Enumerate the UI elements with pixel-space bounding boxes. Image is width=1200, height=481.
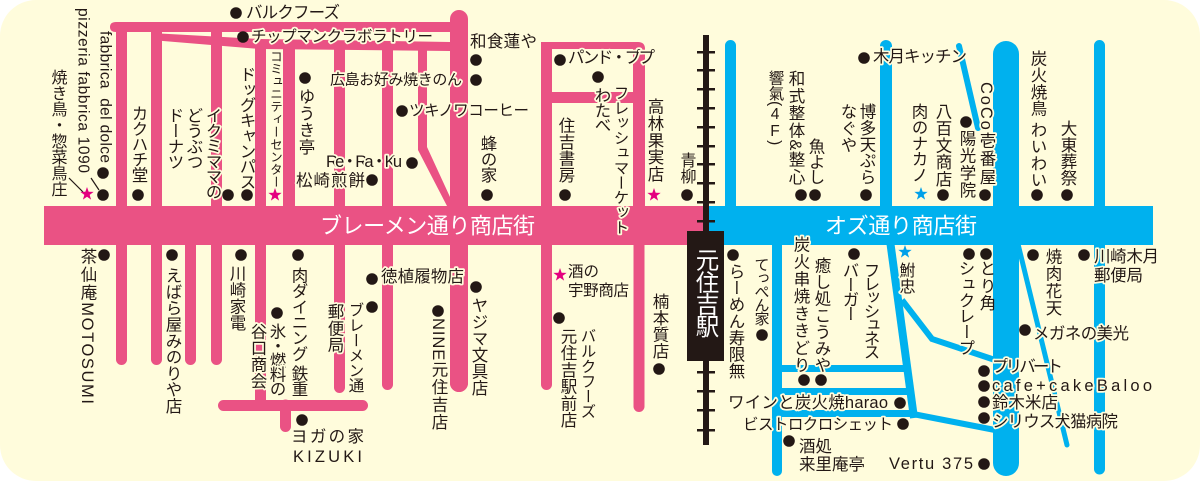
shop: Taniguchi Shokai ice and fuel [248,307,286,397]
shop: Yakiniku Hanaten: 焼肉花天 [1043,248,1062,316]
community centre: コミュニティーセンター [268,50,282,188]
shop: Bulk Foods Motosumiyoshi station: バルクフーズ [578,328,596,419]
shop: Bulk Foods Motosumiyoshi station: 元住吉駅前店 [558,328,577,428]
shop: Wa-shiki Seitai & Seishin, Hibiki: 和式整体&整心 [786,70,805,185]
shop: Koumiya: 癒し処こうみや [812,257,831,373]
shop: Niku no Nakano: 肉のナカノ [909,103,927,183]
shop: Sakedokoro Kuriantei: 来里庵亭 [799,455,865,474]
shop: Suzuki rice: 鈴木米店 [992,393,1058,412]
street name: Oz: オズ通り商店街 [825,214,977,238]
shop: Ikumimama no Doubutsu Donuts: ドーナツ [165,107,183,170]
shop: Yoga no Ie Kizuki: KIZUKI [293,448,362,466]
shop: Sumibi Yakitori Waiwai: 炭火焼鳥 わいわい [1028,50,1047,188]
shop: Wine and charcoal harao: ワインと炭火焼harao [728,393,888,412]
station box: Motosumiyoshi: 元住吉駅 [692,248,719,338]
street name: Bremen: ブレーメン通り商店街 [320,214,535,238]
post office: Bremen [325,301,378,393]
pink road network: Bremen street [44,10,703,426]
shop: Sake no Uno Shoten: 宇野商店 [568,282,629,300]
shop: Kakuhachido: カクハチ堂 [129,105,147,183]
shop: Aoyagi: 青柳 [678,152,696,184]
shop: Freshness Burger: フレッシュネス [861,262,879,360]
shop: pizzeria fabbrica 1090: pizzeria fabbrica 1090 [74,8,92,173]
shop: Daito funeral: 大東葬祭 [1058,120,1077,186]
railway line [697,35,715,445]
shop: cafe+cake Baloo: cafe+cakeBaloo [992,377,1152,395]
post office: Kawasaki Kizuki: 川崎木月 [1094,247,1159,266]
shop: Ikumimama no Doubutsu Donuts: イクミママの [203,107,221,200]
shop: Yukitei: ゆうき亭 [296,88,315,156]
shop: CoCo Ichibanya: CoCo壱番屋 [977,82,996,185]
shop: Yoga no Ie Kizuki [291,414,364,466]
shop: NINE Motosumiyoshi: NINE元住吉店 [429,318,448,430]
shop: Yaomon Shoten: 八百文商店 [933,103,952,187]
shop: Watabe: わたべ [592,87,611,133]
shop: Sake no Uno Shoten: 酒の [568,262,599,280]
shop: Ikumimama no Doubutsu Donuts: どうぶつ [184,107,203,170]
shop: Yakiniku Hanaten [1027,248,1062,316]
shop: Taniguchi Shokai ice and fuel: 谷口商会 [248,323,267,389]
shop: Pribart: プリバート [992,357,1063,376]
shop: Hakata Tempura Naguya: なぐや [838,103,856,153]
shop: Niku Dining Tetsuju: 肉ダイニング 鉄重 [289,267,308,397]
shop: yakitori Torisho [48,69,94,200]
shop: Aoyagi [678,152,696,201]
post office: Kawasaki Kizuki [1078,247,1159,285]
shop: Taniguchi Shokai ice and fuel: 氷・燃料の [267,323,286,397]
shop: Fresh Market: フレッシュマーケット [612,85,628,235]
shop: Mokugetsu Kitchen: 木月キッチン [873,47,967,66]
shop: Re-Ra-Ku: Re・Ra・Ku [326,153,402,171]
shop: Bistro Crochet: ビストロクロシェット [743,416,893,434]
shop: Tsukinowa Coffee: ツキノワコーヒー [409,102,529,120]
shop: Funachu [896,245,916,294]
shop: Hachinoya [478,135,497,201]
shop: Kawasaki Kaden: 川崎家電 [227,265,246,331]
shop: Ebaraya Minoriya: えばら屋みのりや店 [163,267,182,414]
clinic: Sirius animal hospital: シリウス犬猫病院 [992,412,1118,431]
shop: Washoku Hasuya [470,32,537,66]
shop: Hachinoya: 蜂の家 [478,135,497,184]
shop: Pando Pupu: パンド・ププ [568,48,656,67]
shop: fabbrica del dolce: fabbrica del dolce [96,31,114,163]
school: Yoko Gakuin: 陽光学院 [957,130,976,198]
shop: Wa-shiki Seitai & Seishin, Hibiki [766,70,807,201]
post office: Kawasaki Kizuki: 郵便局 [1094,266,1143,285]
shop: Freshness Burger: バーガー [840,262,858,322]
shop: Ramen Jugemu: らーめん寿限無 [726,263,745,379]
shop: pizzeria fabbrica 1090 [74,8,109,201]
shop: Megane no Bikou: メガネの美光 [1033,324,1129,343]
shop: Teppenya: てっぺん家 [752,257,770,327]
shop: Matsuzaki senbei: 松崎煎餅 [296,171,365,190]
shop: Funachu: 鮒忠 [896,262,916,294]
post office: Bremen: ブレーメン通 [346,302,364,393]
shop: Ikumimama no Doubutsu Donuts [165,107,234,201]
shop: Bulk Foods: バルクフーズ [246,3,340,22]
shop: Torikaku: とり角 [977,260,996,312]
shop: Sakedokoro Kuriantei: 酒処 [799,437,832,456]
shop: Hakata Tempura Naguya [838,103,876,201]
shop: Kikidori: 炭火串焼ききどり [791,236,810,373]
shop: Dog Campus: ドッグキャンパス [237,66,255,190]
shop: Washoku Hasuya: 和食蓮や [470,32,537,51]
shop: Chasen-an Motosumi [78,248,110,404]
shop: Freshness Burger [840,248,879,360]
shop: Sake no Uno Shoten [553,262,629,300]
shop: yakitori Torisho: 焼き鳥・惣菜鳥庄 [48,69,68,197]
station box: Motosumiyoshi [687,231,724,361]
shop: Chipmunk Laboratory: チップマンクラボラトリー [251,28,433,46]
shop: Uoyoshi [806,138,825,201]
shop: Hakata Tempura Naguya: 博多天ぷら [857,103,876,185]
shop: Yajima stationery: ヤジマ文具店 [469,297,488,396]
shop: Yoga no Ie Kizuki: ヨガの家 [291,427,364,446]
shop: Takabayashi fruit shop: 高林果実店 [645,98,664,182]
shop: Bulk Foods Motosumiyoshi station [553,312,596,428]
post office: Bremen: 郵便局 [325,303,344,354]
blue road network: Oz street [705,40,1153,476]
shop: Hiroshima okonomiyaki Non: 広島お好み焼きのん [330,72,462,88]
shop: Sumiyoshi Shobo: 住吉書房 [556,117,575,184]
shop: Kusumoto pawn: 楠本質店 [650,293,669,359]
shop: Wa-shiki Seitai & Seishin, Hibiki: 響氣( 4F ) [766,70,784,145]
shop: Crepe: シュクレープ [956,260,974,356]
shop: Watabe [592,71,611,133]
shop: Chasen-an Motosumi: 茶仙庵MOTOSUMI [78,248,97,404]
shop: Vertu 375: Vertu 375 [889,455,973,473]
shop: Uoyoshi: 魚よし [806,138,825,185]
shop: Sakedokoro Kuriantei [783,435,865,474]
shop: Tokuue footwear: 徳植履物店 [381,267,464,286]
